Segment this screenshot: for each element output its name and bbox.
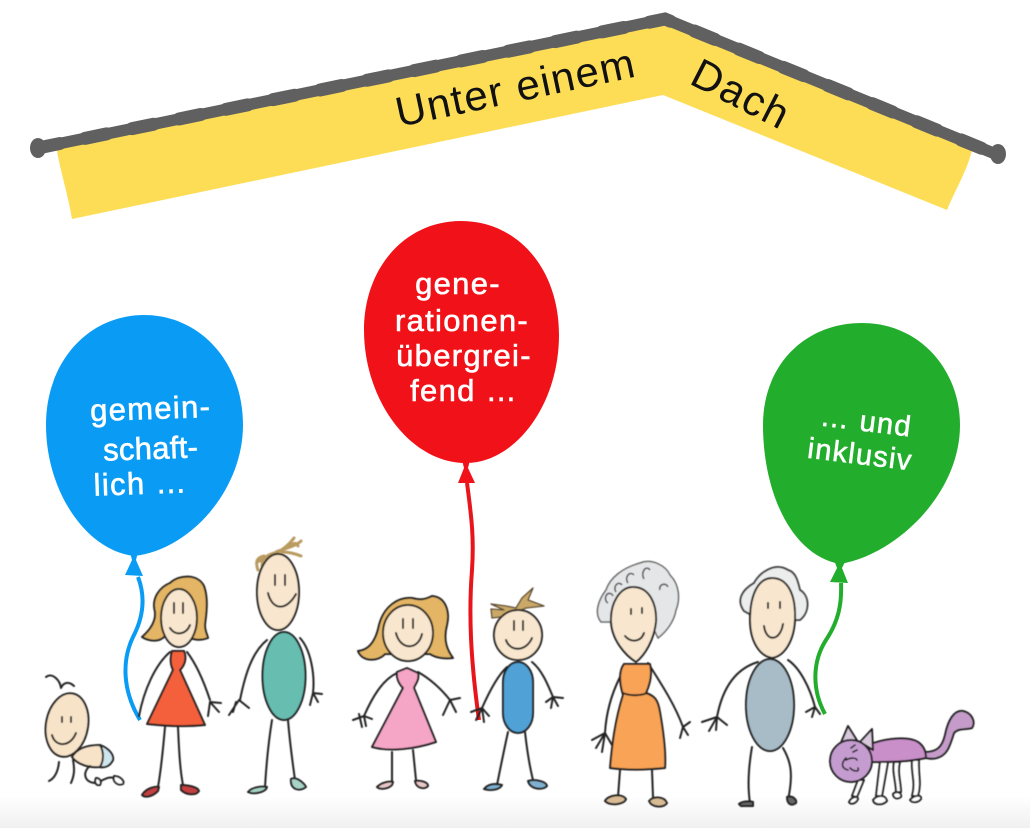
- father face: [268, 575, 296, 607]
- mother head: [161, 589, 197, 647]
- grandfather hair: [740, 567, 808, 620]
- mother hair: [142, 577, 208, 641]
- grandmother hair: [597, 561, 678, 638]
- blue balloon text: gemein-: [90, 389, 212, 428]
- father head: [257, 554, 299, 630]
- grandmother face: [625, 608, 644, 641]
- blue balloon body: [46, 315, 243, 576]
- figure: mother in red dress: [139, 577, 221, 797]
- mother shoes: [142, 785, 199, 797]
- girl shoes: [377, 781, 428, 789]
- girl arms and legs: [353, 672, 460, 782]
- roof: [30, 19, 1006, 219]
- red balloon text: gene-: [415, 266, 501, 301]
- grandmother waist line: [623, 693, 647, 695]
- roof: left end cap: [30, 138, 46, 158]
- boy head: [494, 610, 542, 660]
- floor shade: [0, 796, 1030, 828]
- figure: boy in blue shirt: [471, 588, 563, 790]
- cat legs: [852, 760, 920, 797]
- red balloon: [364, 221, 559, 720]
- roof title left: Unter einem: [391, 39, 639, 136]
- father shoes: [248, 778, 306, 793]
- figure: father in teal shirt: [229, 538, 322, 793]
- grandmother curls: [605, 568, 668, 603]
- girl dress: [372, 668, 436, 749]
- blue balloon string: [125, 577, 143, 720]
- boy arms and legs: [471, 662, 563, 785]
- red balloon text line 4: fend …: [410, 373, 518, 408]
- cat feet: [849, 792, 921, 804]
- grandfather arms and legs: [702, 660, 820, 803]
- girl hair: [358, 596, 453, 660]
- green balloon text: … und: [819, 401, 914, 444]
- mother dress: [147, 651, 205, 726]
- mother arms and legs: [139, 652, 221, 787]
- figure: grandmother in orange dress: [592, 561, 690, 807]
- baby diaper: [100, 745, 113, 767]
- figure: girl in pink dress: [353, 596, 460, 789]
- blue balloon text line 2: schaft-: [102, 429, 199, 468]
- girl face: [396, 619, 422, 646]
- cat body: [868, 738, 926, 762]
- baby head: [41, 690, 93, 760]
- girl head: [383, 605, 433, 661]
- people and cat: [41, 538, 974, 807]
- baby feet: [95, 776, 123, 785]
- cat head: [830, 740, 872, 782]
- grandmother arms and legs: [592, 663, 690, 797]
- boy hair: [491, 588, 544, 618]
- grandmother head: [611, 587, 656, 662]
- father hair: [257, 538, 301, 570]
- grandmother dress: [610, 664, 665, 770]
- cat ears: [840, 726, 873, 750]
- grandfather shirt: [746, 659, 794, 751]
- boy shoes: [484, 780, 547, 790]
- blue balloon: [46, 315, 243, 720]
- roof: yellow underside: [56, 22, 973, 219]
- mother face: [170, 603, 190, 633]
- father arms and legs: [229, 638, 322, 787]
- green balloon string: [815, 583, 841, 714]
- figure: grandfather in grey shirt: [702, 567, 820, 806]
- grandfather shoes: [739, 797, 796, 806]
- roof: ridge line bumps: [38, 19, 998, 155]
- grandfather head: [750, 578, 795, 658]
- father shirt: [262, 632, 306, 720]
- figure: baby: [41, 675, 123, 785]
- roof: right end cap: [990, 144, 1006, 164]
- roof: grey ridge line: [38, 19, 998, 155]
- blue balloon text line 3: lich …: [93, 464, 188, 503]
- grandmother shoes: [605, 795, 667, 807]
- cat face: [842, 745, 858, 771]
- green balloon: [763, 323, 960, 714]
- figure: cat: [830, 711, 974, 804]
- green balloon text line 2: inklusiv: [806, 433, 914, 477]
- green balloon body: [763, 323, 960, 583]
- red balloon string: [467, 483, 479, 720]
- red balloon text line 3: übergrei-: [396, 338, 532, 373]
- boy face: [506, 621, 532, 649]
- cat tail: [925, 711, 974, 759]
- boy shirt: [503, 662, 533, 733]
- baby body: [72, 745, 113, 767]
- red balloon body: [364, 221, 559, 483]
- roof title right: Dach: [684, 49, 797, 138]
- baby face and limbs: [46, 675, 114, 783]
- red balloon text line 2: rationen-: [395, 303, 529, 338]
- grandfather face: [764, 602, 783, 638]
